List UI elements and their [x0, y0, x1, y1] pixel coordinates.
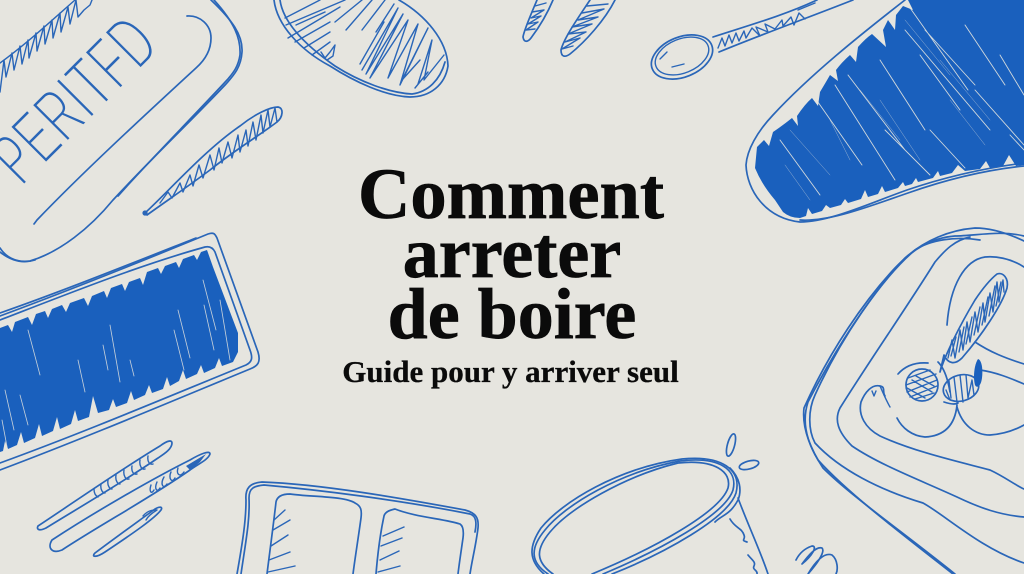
scribbled fill — [755, 0, 1024, 218]
title — [358, 153, 664, 354]
hatched circle — [906, 369, 938, 401]
water drops — [725, 433, 737, 457]
sketch: spoon top — [645, 0, 853, 88]
title: arreter — [403, 213, 621, 293]
sketch: blue filled blob top right — [746, 0, 1024, 222]
hatched spoon handle — [940, 274, 1007, 372]
sketch: hatched oval top centre — [274, 0, 448, 97]
sketch: tilted cup — [532, 433, 768, 574]
scribbled fill — [0, 250, 238, 452]
title: Comment — [358, 153, 664, 234]
sketch: open book bottom — [237, 482, 478, 574]
sketch: hatched pen — [142, 107, 282, 216]
sketch: labelled tray top left — [0, 0, 242, 262]
hatched oval — [940, 371, 982, 405]
sketch: two small hatched pens top — [523, 0, 615, 56]
sketch: blue filled box — [0, 233, 259, 470]
sketch: large plate right — [804, 228, 1024, 574]
sketch: coil scribble — [796, 546, 837, 574]
sketch: three slim pens — [37, 441, 210, 556]
title: de boire — [388, 274, 636, 354]
subtitle: Guide pour y arriver seul — [342, 354, 679, 389]
